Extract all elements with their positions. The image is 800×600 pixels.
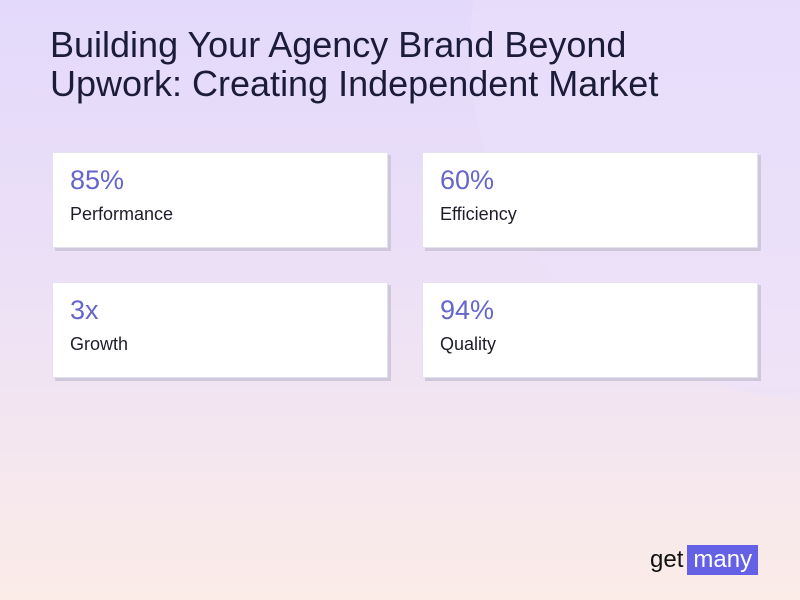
card: performance: 85% bbox=[70, 165, 124, 195]
title: Building Your Agency Brand Beyond bbox=[50, 24, 626, 65]
card: efficiency: Efficiency bbox=[440, 204, 517, 224]
logo bbox=[650, 545, 758, 575]
card: growth: 3x bbox=[70, 295, 99, 325]
card: growth: Growth bbox=[70, 334, 128, 354]
logo: get bbox=[650, 546, 683, 573]
title: Upwork: Creating Independent Market bbox=[50, 63, 658, 104]
card: efficiency: 60% bbox=[440, 165, 494, 195]
card: performance: Performance bbox=[70, 204, 173, 224]
card: growth bbox=[52, 282, 388, 378]
card: performance bbox=[52, 152, 388, 248]
card: quality: Quality bbox=[440, 334, 496, 354]
card: quality bbox=[422, 282, 758, 378]
title bbox=[50, 24, 658, 104]
card: efficiency bbox=[422, 152, 758, 248]
card: quality: 94% bbox=[440, 295, 494, 325]
logo: many bbox=[693, 546, 752, 573]
